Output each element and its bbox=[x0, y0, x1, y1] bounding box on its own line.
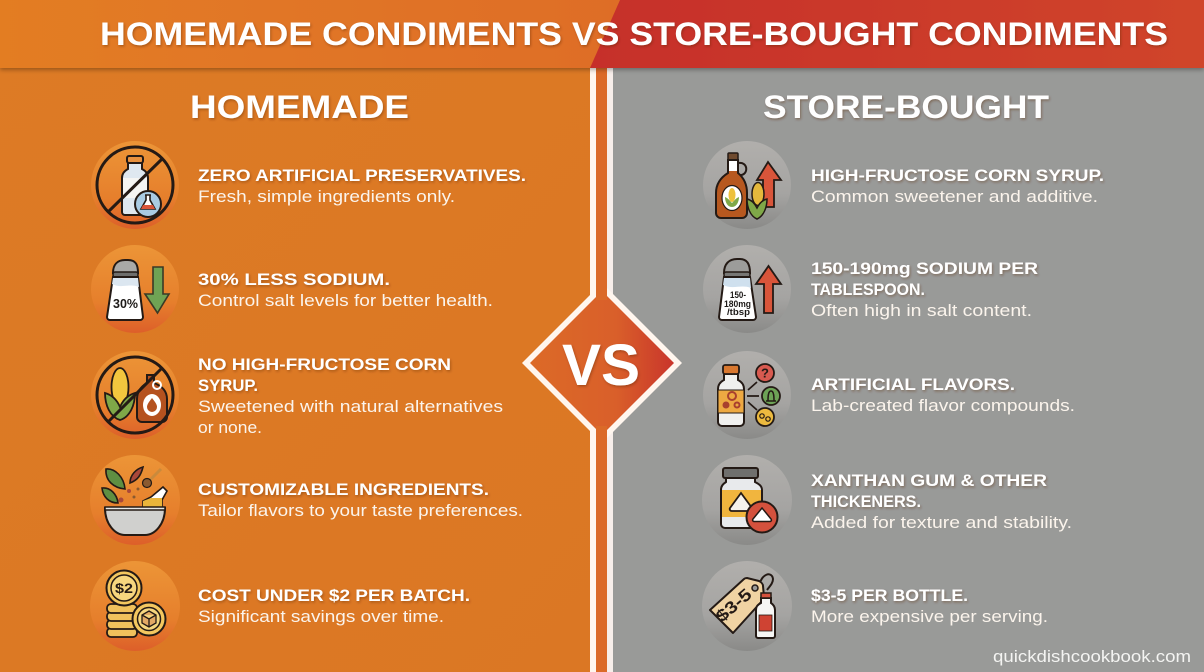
text: 30% LESS SODIUM. bbox=[198, 270, 390, 289]
icon: bottle with compound circles bbox=[703, 351, 791, 439]
text: Lab-created flavor compounds. bbox=[811, 397, 1075, 415]
item: $3-5 per bottle bbox=[702, 561, 1048, 651]
icon: crossed-out corn and syrup bbox=[91, 351, 179, 439]
icon: price tag and sauce bottle: $3-5 bbox=[712, 585, 756, 626]
text bbox=[198, 586, 470, 626]
text: SYRUP. bbox=[198, 376, 258, 395]
item: 150-190mg sodium per tablespoon bbox=[703, 245, 1038, 333]
panel: homemade background bbox=[0, 0, 591, 672]
icon: bottle with compound circles: ? bbox=[761, 366, 769, 380]
text: ZERO ARTIFICIAL PRESERVATIVES. bbox=[198, 166, 526, 185]
item: artificial flavors bbox=[703, 351, 1075, 439]
icon: price tag and sauce bottle bbox=[702, 561, 792, 651]
icon: jar with powder warning bbox=[702, 455, 792, 545]
text: Added for texture and stability. bbox=[811, 514, 1072, 532]
text: Fresh, simple ingredients only. bbox=[198, 188, 455, 206]
panel: store-bought background bbox=[612, 0, 1204, 672]
text: THICKENERS. bbox=[811, 492, 921, 511]
item: cost under $2 per batch bbox=[90, 561, 470, 651]
item: high-fructose corn syrup bbox=[703, 141, 1104, 229]
watermark: quickdishcookbook.com bbox=[993, 647, 1191, 666]
icon: coin stack: $2 bbox=[115, 580, 133, 596]
text bbox=[811, 166, 1104, 206]
text bbox=[198, 166, 526, 206]
title: HOMEMADE CONDIMENTS VS STORE-BOUGHT CONDIMENTS bbox=[100, 16, 1168, 52]
text: HIGH-FRUCTOSE CORN SYRUP. bbox=[811, 166, 1104, 185]
text: Tailor flavors to your taste preferences. bbox=[198, 502, 523, 520]
icon: salt shaker with up arrow: 180mg bbox=[724, 299, 751, 310]
item: zero artificial preservatives bbox=[91, 141, 526, 229]
icon: coin stack bbox=[90, 561, 180, 651]
icon: salt shaker with down arrow: 30% bbox=[113, 297, 138, 311]
text: More expensive per serving. bbox=[811, 608, 1048, 626]
item: customizable ingredients bbox=[90, 455, 523, 545]
text: or none. bbox=[198, 419, 262, 437]
heading: homemade: HOMEMADE bbox=[190, 89, 409, 125]
text bbox=[811, 471, 1072, 532]
item: no high-fructose corn syrup bbox=[91, 351, 503, 439]
text: NO HIGH-FRUCTOSE CORN bbox=[198, 355, 451, 374]
icon: mixing bowl with herbs and spices bbox=[90, 455, 180, 545]
item: 30% less sodium bbox=[91, 245, 493, 333]
heading: store-bought: STORE-BOUGHT bbox=[763, 89, 1050, 125]
text bbox=[198, 355, 503, 437]
text bbox=[811, 259, 1038, 320]
text bbox=[198, 270, 493, 310]
header banner bbox=[0, 0, 1204, 68]
text: Sweetened with natural alternatives bbox=[198, 398, 503, 416]
text: $3-5 PER BOTTLE. bbox=[811, 586, 968, 605]
text bbox=[811, 586, 1048, 626]
text bbox=[198, 480, 523, 520]
text: Common sweetener and additive. bbox=[811, 188, 1098, 206]
icon: salt shaker with up arrow: /tbsp bbox=[727, 307, 750, 318]
icon: salt shaker with up arrow bbox=[703, 245, 791, 333]
text: Control salt levels for better health. bbox=[198, 292, 493, 310]
item: xanthan gum and other thickeners bbox=[702, 455, 1072, 545]
text: Often high in salt content. bbox=[811, 302, 1032, 320]
text: CUSTOMIZABLE INGREDIENTS. bbox=[198, 480, 489, 499]
icon: salt shaker with down arrow bbox=[91, 245, 179, 333]
text bbox=[811, 375, 1075, 415]
text: 150-190mg SODIUM PER bbox=[811, 259, 1038, 278]
text: COST UNDER $2 PER BATCH. bbox=[198, 586, 470, 605]
icon: syrup bottle, corn and up arrow bbox=[703, 141, 791, 229]
text: Significant savings over time. bbox=[198, 608, 444, 626]
icon: salt shaker with up arrow: 150- bbox=[730, 290, 746, 301]
VS label: VS bbox=[562, 333, 640, 398]
VS diamond badge bbox=[522, 280, 682, 446]
text: TABLESPOON. bbox=[811, 280, 925, 299]
icon: crossed-out bottle with flask bbox=[91, 141, 179, 229]
text: XANTHAN GUM & OTHER bbox=[811, 471, 1047, 490]
text: ARTIFICIAL FLAVORS. bbox=[811, 375, 1015, 394]
center divider bbox=[590, 60, 613, 672]
